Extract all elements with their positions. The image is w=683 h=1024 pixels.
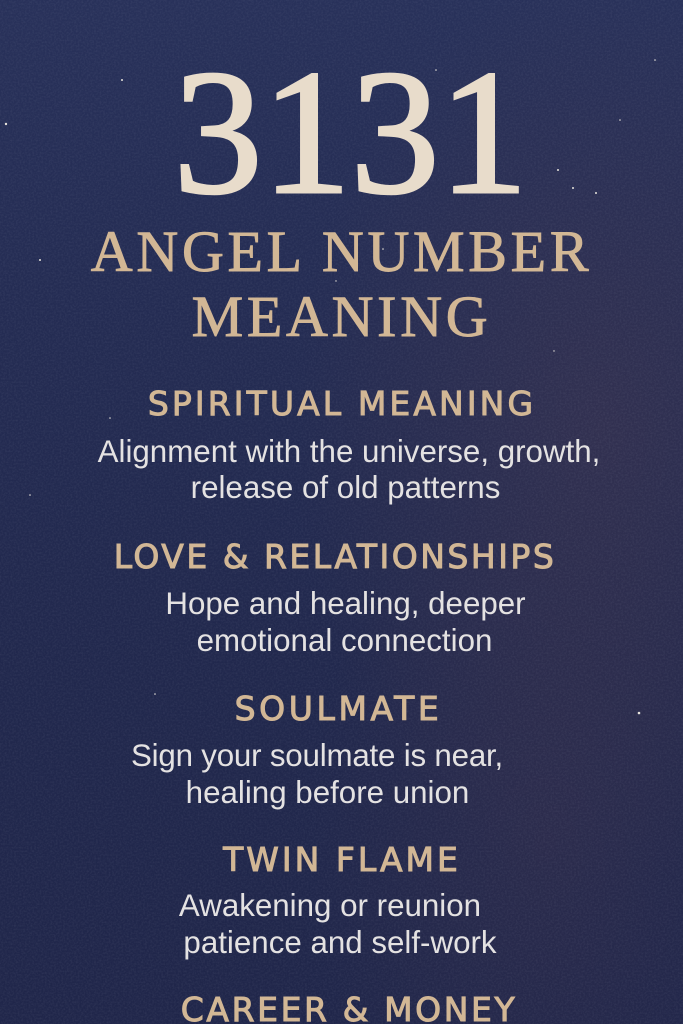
section: soulmate [131,689,503,810]
subtitle [90,219,592,349]
heading: SPIRITUAL MEANING [148,384,536,423]
section: twin flame [179,840,497,960]
text: Awakening or reunion [179,888,481,923]
heading: TWIN FLAME [223,840,461,879]
text: emotional connection [197,623,492,658]
text [98,434,600,505]
text: Sign your soulmate is near, [131,738,503,773]
subtitle: ANGEL NUMBER [91,219,592,284]
heading: SOULMATE [235,689,442,728]
text: Alignment with the universe, growth, [98,434,600,469]
text: healing before union [186,775,469,810]
text [131,738,503,810]
title number: 3131 [174,33,528,231]
text: release of old patterns [191,470,500,505]
subtitle: MEANING [192,284,491,349]
heading: LOVE & RELATIONSHIPS [114,537,556,576]
text [179,888,497,960]
text: Hope and healing, deeper [165,586,526,621]
section: spiritual meaning [98,384,600,505]
text: patience and self-work [183,925,497,960]
section: love and relationships [114,537,556,658]
text [165,586,526,658]
